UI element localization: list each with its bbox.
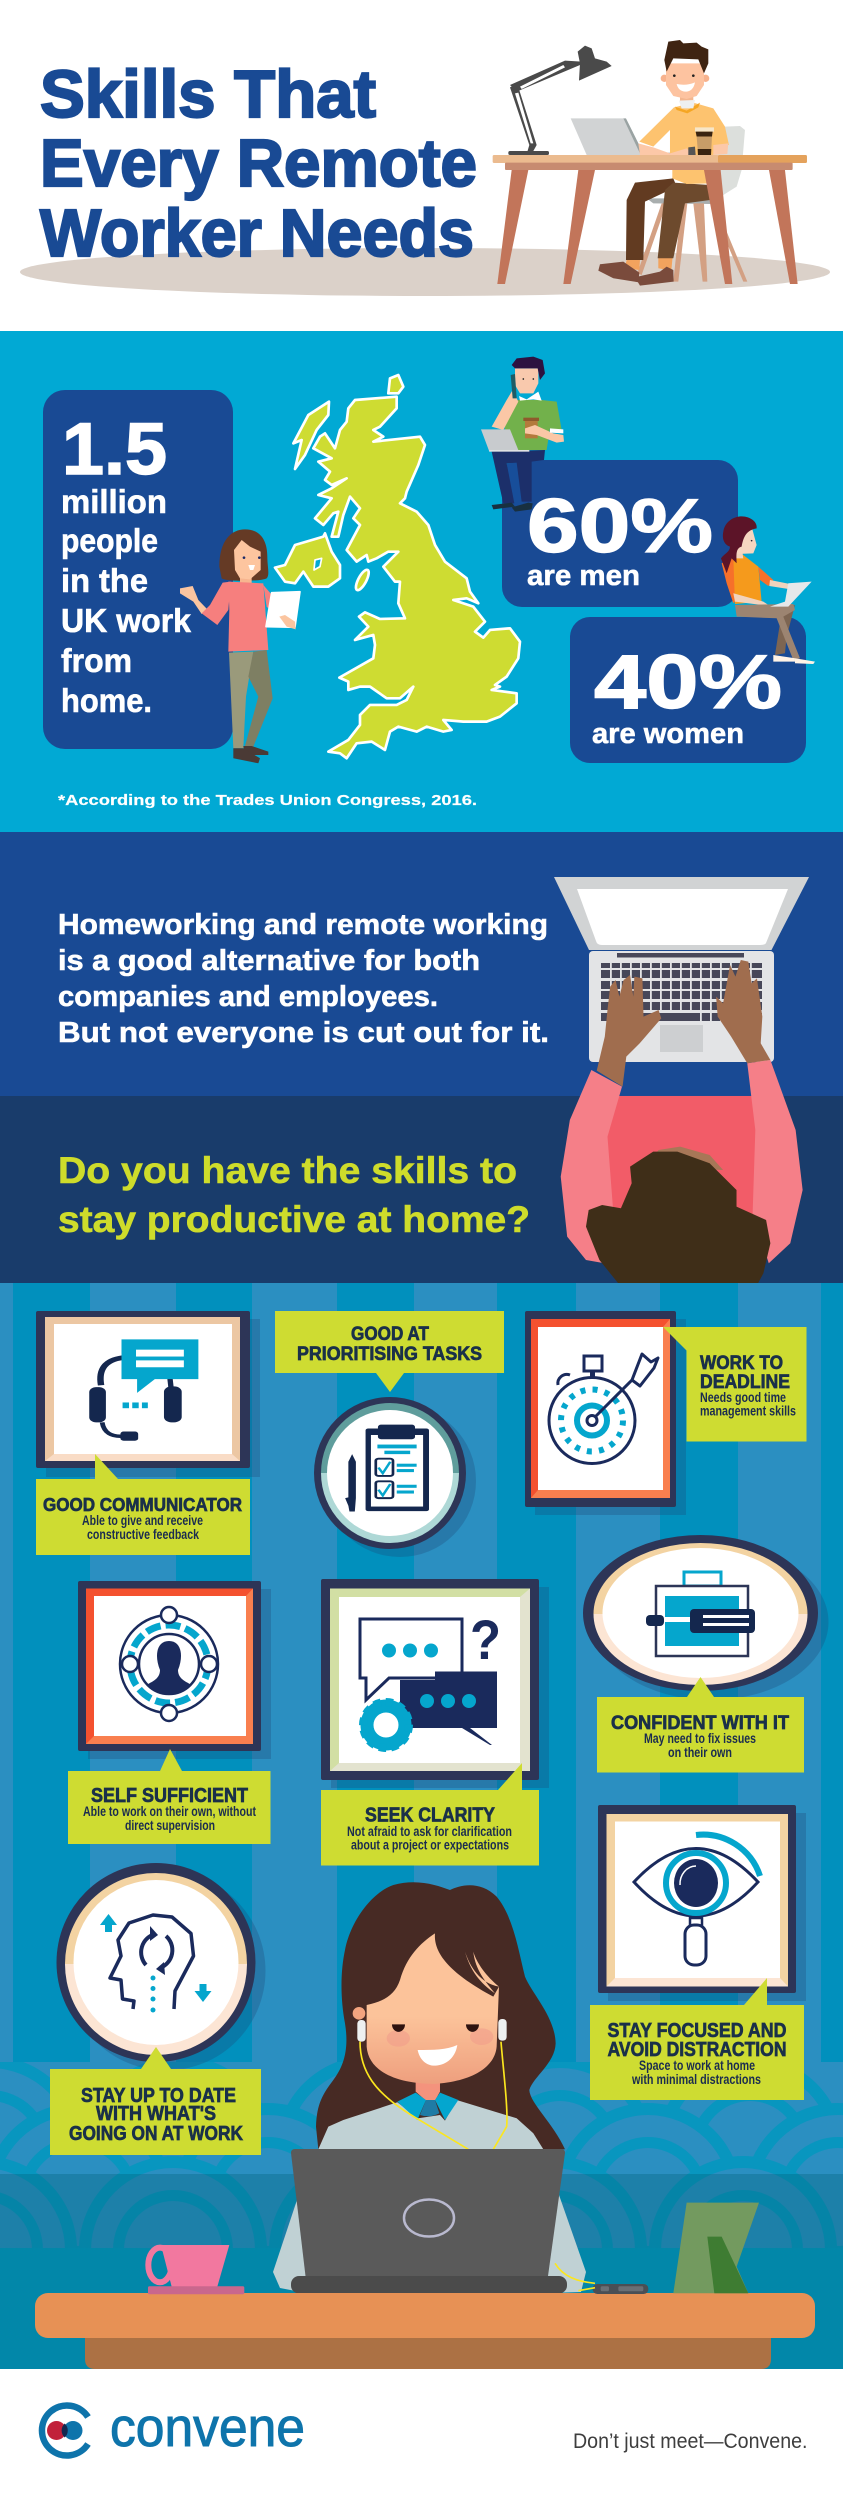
stat box: 1.5 million: people xyxy=(61,522,158,559)
label: STAY FOCUSED AND xyxy=(608,2020,786,2042)
title: Every Remote xyxy=(40,126,477,201)
title xyxy=(40,57,477,271)
laptop xyxy=(291,2149,567,2294)
icon: coffee cup xyxy=(148,2245,244,2294)
label xyxy=(36,1454,250,1555)
intro text: is a good alternative for both xyxy=(58,945,480,977)
intro text: companies and employees. xyxy=(58,981,438,1013)
label: Not afraid to ask for clarification xyxy=(347,1823,512,1839)
stat box: 60% are men: are men xyxy=(527,560,640,592)
skill: stay up to date xyxy=(50,1863,266,2155)
skill: seek clarity xyxy=(321,1579,549,1866)
stat box: 1.5 million: in the xyxy=(61,562,148,599)
label: CONFIDENT WITH IT xyxy=(611,1713,789,1734)
label xyxy=(275,1311,504,1392)
icon: head with refresh arrows xyxy=(100,1914,212,2012)
label xyxy=(590,1978,804,2100)
illustration: woman with earphones at desk xyxy=(273,1882,586,2294)
wordmark: convene xyxy=(110,2396,305,2458)
panel: intro band xyxy=(0,832,843,1096)
skill: good communicator xyxy=(36,1311,260,1555)
panel: question band xyxy=(0,1096,843,1283)
label: WORK TO xyxy=(700,1353,783,1374)
label xyxy=(597,1677,804,1772)
skill: stay focused xyxy=(590,1805,806,2100)
illustration: man at desk xyxy=(493,40,807,286)
title: Worker Needs xyxy=(40,196,474,271)
question text xyxy=(58,1150,530,1240)
logo mark xyxy=(42,2406,88,2456)
label: PRIORITISING TASKS xyxy=(297,1344,482,1365)
head and torso xyxy=(316,1882,565,2149)
skill: work to deadline xyxy=(525,1311,806,1515)
stat box: 40% are women: 40% xyxy=(594,640,782,725)
footnote: *According to the Trades Union Congress, 2016. xyxy=(58,792,477,809)
intro text: But not everyone is cut out for it. xyxy=(58,1017,549,1049)
person xyxy=(561,960,803,1283)
label: SEEK CLARITY xyxy=(365,1804,496,1826)
logo xyxy=(42,2396,305,2458)
skill: confident with IT xyxy=(583,1535,828,1772)
panel: header xyxy=(0,0,843,331)
stat box: 40% are women: are women xyxy=(592,718,744,750)
stat box: 60% are men: 60% xyxy=(527,484,713,569)
stat box: 1.5 million xyxy=(43,390,233,749)
skill: good at prioritising tasks xyxy=(275,1311,504,1557)
label: direct supervision xyxy=(125,1817,215,1833)
panel: UK statistics xyxy=(0,331,843,832)
stat box: 60% are men xyxy=(502,460,738,607)
tagline: Don’t just meet—Convene. xyxy=(573,2430,808,2453)
icon: headset with speech bubble xyxy=(89,1339,198,1441)
label: GOING ON AT WORK xyxy=(69,2123,243,2145)
label: Able to give and receive xyxy=(82,1512,203,1528)
label xyxy=(68,1749,270,1844)
stat box: 1.5 million: from xyxy=(61,642,132,679)
label xyxy=(50,2047,261,2155)
icon: clipboard checklist xyxy=(345,1425,429,1512)
desk xyxy=(35,2293,815,2369)
label: on their own xyxy=(668,1744,732,1760)
laptop xyxy=(554,877,809,1062)
label: WITH WHAT'S xyxy=(96,2103,216,2125)
icon: picture frame, phone and cable xyxy=(555,2203,759,2294)
label: about a project or expectations xyxy=(351,1836,509,1852)
label: constructive feedback xyxy=(87,1526,199,1542)
intro text xyxy=(58,909,549,1049)
label: with minimal distractions xyxy=(631,2071,761,2087)
label: Able to work on their own, without xyxy=(83,1803,256,1819)
label: Space to work at home xyxy=(639,2057,755,2073)
stat box: 1.5 million: million xyxy=(61,483,167,520)
icon: speech bubbles and gear xyxy=(360,1608,501,1748)
question text: Do you have the skills to xyxy=(58,1150,517,1191)
stat box: 40% are women xyxy=(570,617,806,763)
label: STAY UP TO DATE xyxy=(81,2085,236,2107)
icon: eye magnifier xyxy=(634,1835,760,1965)
skill: self sufficient xyxy=(68,1581,271,1844)
panel: footer xyxy=(0,2369,843,2500)
icon: briefcase xyxy=(646,1572,755,1656)
label: Needs good time xyxy=(700,1389,786,1405)
stat box: 1.5 million: UK work xyxy=(61,602,192,639)
label xyxy=(663,1327,806,1442)
question text: stay productive at home? xyxy=(58,1199,530,1240)
stat box: 1.5 million: home. xyxy=(61,682,152,719)
UK map xyxy=(275,375,520,758)
label xyxy=(321,1763,539,1866)
icon: person in ring xyxy=(120,1607,218,1721)
label: GOOD COMMUNICATOR xyxy=(43,1495,242,1515)
icon: speech bubbles and gear: ? xyxy=(470,1608,501,1671)
title: Skills That xyxy=(40,57,376,132)
label: DEADLINE xyxy=(700,1372,790,1393)
illustration: man on phone and woman with laptop xyxy=(481,357,815,664)
label: May need to fix issues xyxy=(644,1730,756,1746)
intro text: Homeworking and remote working xyxy=(58,909,548,941)
label: AVOID DISTRACTION xyxy=(608,2039,786,2061)
icon: stopwatch target xyxy=(549,1354,658,1464)
illustration: woman typing on laptop, top view xyxy=(554,877,809,1283)
arms xyxy=(273,2195,586,2293)
wall scallop pattern xyxy=(0,2056,843,2344)
stat box: 1.5 million: 1.5 xyxy=(62,409,167,490)
floor ellipse xyxy=(20,248,830,296)
panel: skills wall xyxy=(0,1283,843,2369)
label: GOOD AT xyxy=(351,1324,429,1345)
illustration: woman with tablet xyxy=(180,529,300,763)
label: SELF SUFFICIENT xyxy=(91,1785,248,1807)
label: management skills xyxy=(700,1402,796,1418)
